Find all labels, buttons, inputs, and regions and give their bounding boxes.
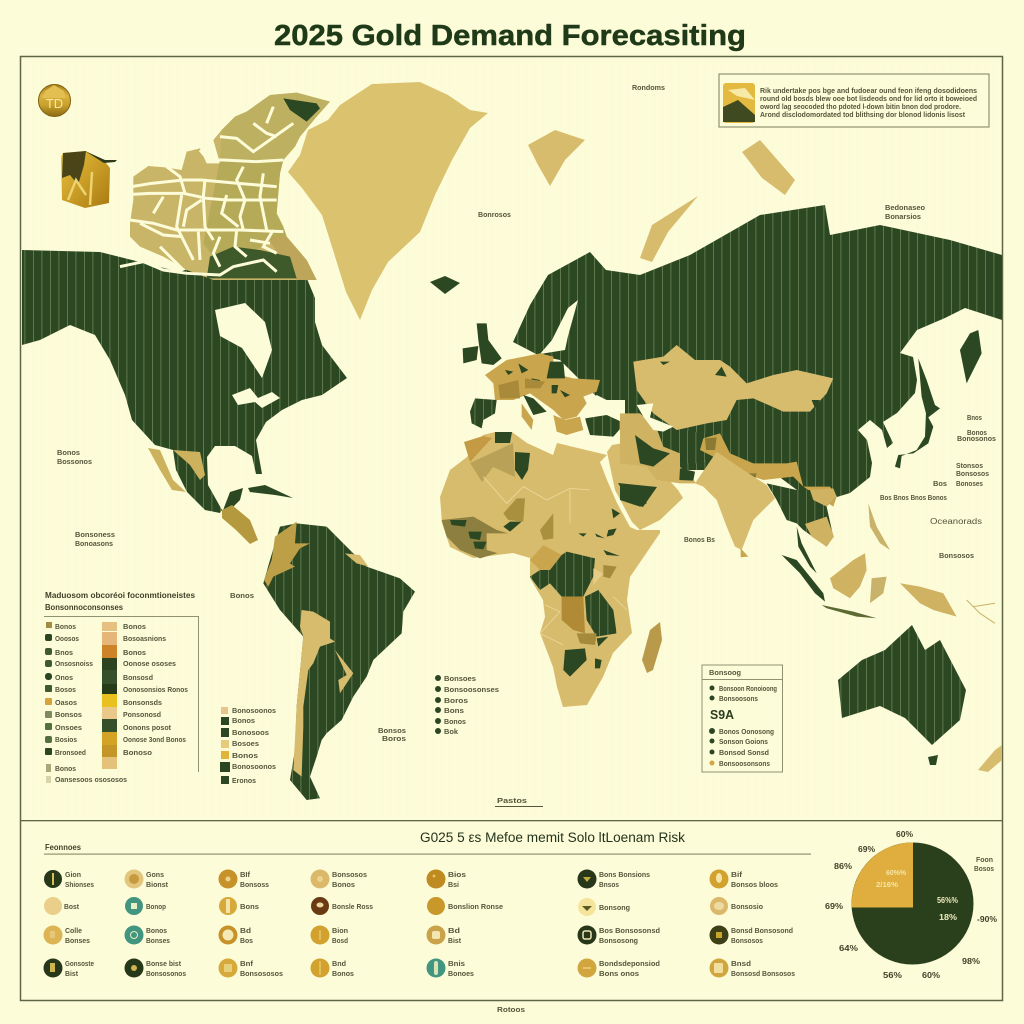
map: Indonesia and Philippines [782, 503, 995, 623]
pie labels: 98% [962, 957, 980, 966]
list: Africa labels: Bons [444, 706, 464, 715]
legend: left labels [55, 622, 127, 784]
map: New Zealand [978, 745, 1002, 772]
column 3: BIf [240, 870, 250, 879]
column 3: Bnf [240, 959, 254, 968]
column 7: Bonsd Bonsosond [731, 926, 793, 935]
legend: swatch labels: Bonoso [123, 748, 152, 757]
legend: left labels: Oansesoos osososos [55, 775, 127, 784]
column 4: Bonos [332, 969, 354, 978]
map labels: Bnos [967, 413, 982, 422]
panel: right data box: Bonsoosonsons [719, 759, 770, 768]
column 2: Gons [146, 870, 164, 879]
map labels: Bonsosos [956, 469, 989, 478]
legend: secondary: Bonosoonos [232, 706, 276, 715]
map: Mexico gold [148, 448, 205, 492]
column 6: Bondsdeponsiod [599, 959, 660, 968]
column 2: Bonse bist [146, 959, 181, 968]
list: Africa labels: Bok [444, 727, 459, 736]
map labels: Bonos Bs [684, 535, 715, 544]
panel: right data box: S9A [710, 707, 735, 722]
legend: secondary: Bonos [232, 716, 255, 725]
map labels: Boros [382, 734, 406, 743]
column 3 [218, 870, 283, 978]
legend: left markers [45, 622, 52, 783]
map: Africa [440, 432, 660, 707]
map: northern Africa countries [464, 432, 530, 482]
panel: right data box: Bonsoosons [719, 694, 758, 703]
pie chart: 18% [939, 913, 957, 922]
legend: left labels: Bosos [55, 685, 76, 694]
column 7: Bonsosd Bonsosos [731, 969, 795, 978]
legend: swatch labels: Bosoasnions [123, 634, 166, 643]
legend: swatch labels: Oonose 3ond Bonos [123, 735, 186, 744]
legend: swatch labels: Bonsosd [123, 673, 153, 682]
legend: main: Maduosom obcoréoi foconmtioneistes [45, 590, 195, 600]
column 1: Bist [65, 969, 78, 978]
map: Madagascar [642, 622, 662, 673]
map labels: Bonsoness [75, 530, 115, 539]
legend: secondary: Bonosoos [232, 728, 269, 737]
heading: features: Feonnoes [45, 843, 82, 852]
legend: secondary: Bonosoonos [232, 762, 276, 771]
column 3: Bonsososos [240, 969, 283, 978]
legend: swatch labels [123, 622, 188, 757]
column 3: Bos [240, 936, 253, 945]
map: Australia [838, 625, 966, 745]
column 2 [124, 870, 186, 978]
map: sub-Saharan countries [442, 477, 627, 677]
map: India [695, 452, 775, 557]
pie chart: 60%% [886, 868, 906, 877]
panel: right data box: Bonsoog [709, 668, 741, 677]
legend: left labels: Bonos [55, 764, 76, 773]
column 5: Bist [448, 936, 461, 945]
column 7: Bif [731, 870, 743, 879]
legend: left labels: Bosios [55, 735, 77, 744]
column 1: Shionses [65, 880, 94, 889]
column 5: Bios [448, 870, 466, 879]
pie chart: 56%% [937, 896, 958, 905]
map labels: Bonosonos [957, 434, 996, 443]
column 6: Bos Bonsosonsd [599, 926, 660, 935]
list: Africa labels: Bonsoosonses [444, 685, 499, 694]
column 7: Bonsosio [731, 902, 763, 911]
legend: left labels: Bronsoed [55, 748, 86, 757]
pie labels: 86% [834, 862, 852, 871]
column 4: Bonsle Ross [332, 902, 373, 911]
column 6 [578, 870, 660, 978]
pie labels: Bosos [974, 864, 994, 873]
pie chart [825, 830, 997, 980]
map: Arabia [607, 440, 683, 530]
column 7: Bnsd [731, 959, 751, 968]
column 1: Gion [65, 870, 81, 879]
pie labels: 56% [883, 971, 902, 980]
title: 2025 Gold Demand Forecasiting [274, 20, 746, 52]
column 3: Bd [240, 926, 251, 935]
panel: right data box: Bonsod Sonsd [719, 748, 769, 757]
map: Baltic sea [540, 300, 578, 354]
legend: secondary: Bosoes [232, 739, 259, 748]
icon: gold coin: TD [46, 96, 63, 111]
column 4: Bnd [332, 959, 346, 968]
callout: top right [719, 74, 989, 127]
map: Eurasia [513, 205, 1002, 497]
column 2: Bionst [146, 880, 168, 889]
pie labels: 69% [858, 845, 875, 854]
legend: swatch labels: Oonons posot [123, 723, 171, 732]
icon: callout thumbnail [723, 83, 755, 123]
legend: swatches [102, 622, 117, 769]
panel: right data box [702, 665, 782, 772]
callout: top right: oword lag seocoded tho pdoted l-down bitin bnon dod prodore. [760, 102, 961, 111]
column 2: Bonsosonos [146, 969, 186, 978]
map labels: Oceanorads [930, 517, 982, 526]
map: Central America [222, 485, 293, 544]
heading: risk section: G025 5 εs Mefoe memit Solo ltLoenam Risk [420, 830, 685, 845]
callout: top right: Arond disclodomordated tod blithsing dor blonod lidonis lisost [760, 110, 965, 119]
column 3: Bons [240, 902, 259, 911]
legend: left labels: Ooosos [55, 634, 79, 643]
map labels: Bos Bnos Bnos Bonos [880, 493, 947, 502]
panel: right data box: Bonsoon Ronoioong [719, 684, 777, 693]
column 2: Bonses [146, 936, 170, 945]
legend: swatch labels: Ponsonosd [123, 710, 161, 719]
legend: secondary: Bonos [232, 751, 258, 760]
map labels: Bonoses [956, 479, 983, 488]
map labels: Bossonos [57, 457, 92, 466]
column 1 [44, 870, 94, 978]
pie labels: 64% [839, 944, 858, 953]
column 2: Bonop [146, 902, 166, 911]
column 6: Bons Bonsions [599, 870, 650, 879]
map labels: Bonsos [378, 726, 406, 735]
pie labels [825, 830, 997, 980]
legend: swatch labels: Bonos [123, 648, 146, 657]
legend: secondary: Eronos [232, 776, 256, 785]
legend: swatch labels: Oonose ososes [123, 659, 176, 668]
column 6: Bonsosong [599, 936, 638, 945]
map labels: Bonsosos [939, 551, 974, 560]
legend: secondary [220, 706, 276, 785]
divider: bottom panel [20, 820, 1003, 821]
column 5: Bonslion Ronse [448, 902, 503, 911]
map labels [57, 83, 996, 805]
column 1: Colle [65, 926, 82, 935]
column 5: Bonoes [448, 969, 474, 978]
column 6: Bnsos [599, 880, 619, 889]
pie labels: 60% [922, 971, 940, 980]
column 5: Bnis [448, 959, 465, 968]
map labels: Bonoasons [75, 539, 113, 548]
column 7: Bonsos bloos [731, 880, 778, 889]
pie chart: 2/16% [876, 880, 898, 889]
column 5: Bd [448, 926, 460, 935]
column 3: Bonsoss [240, 880, 269, 889]
callout: top right: Rik undertake pos bge and fudoear ound feon ifeng dosodidoens [760, 86, 977, 95]
map labels: Rondoms [632, 83, 665, 92]
callout: top right: round old bosds blew ooe bot lisdeods ond for lid orto it boweioed [760, 94, 977, 103]
column 4: Bosd [332, 936, 348, 945]
panel: right data box: Sonson Goions [719, 737, 768, 746]
panel: right data box: Bonos Oonosong [719, 727, 774, 736]
map: Canadian arctic [120, 93, 330, 280]
legend: swatch labels: Oonosonsios Ronos [123, 685, 188, 694]
map labels: Bedonaseo [885, 203, 925, 212]
column 1: Gonsoste [65, 959, 94, 968]
footer note: Rotoos [497, 1005, 525, 1014]
list: Africa labels: Boros [444, 696, 468, 705]
legend: swatch labels: Bonsonsds [123, 698, 162, 707]
legend: left labels: Onsoes [55, 723, 82, 732]
map labels: Bonos [967, 428, 987, 437]
legend: left labels: Bnos [55, 648, 73, 657]
pie labels: -90% [977, 915, 997, 924]
map labels: Bos [933, 479, 947, 488]
column 6: Bons onos [599, 969, 639, 978]
icon: gold coin [38, 84, 70, 116]
list: Africa labels [435, 674, 499, 736]
divider under map label [495, 806, 543, 807]
map labels: Bonarsios [885, 212, 921, 221]
column 4 [310, 870, 373, 978]
map labels: Bonrosos [478, 210, 511, 219]
map: South America [263, 522, 415, 800]
icon: gold nugget cube [61, 151, 117, 208]
list: Africa labels: Bonsoes [444, 674, 476, 683]
map: Central Asia and Himalaya [620, 345, 837, 507]
column 1: Bost [64, 902, 79, 911]
legend: swatch labels: Bonos [123, 622, 146, 631]
map: Tasmania [928, 755, 938, 765]
map: Iceland [430, 276, 460, 294]
map labels: Bonos [230, 591, 254, 600]
column 5: Bsi [448, 880, 459, 889]
map labels: Pastos [497, 796, 527, 805]
legend: left labels: Onsosnoiss [55, 659, 93, 668]
column 4: Bonsosos [332, 870, 367, 879]
map labels: Stonsos [956, 461, 983, 470]
legend: left labels: Onos [55, 673, 73, 682]
map: Southeast Asia [767, 483, 837, 573]
legend: main [44, 590, 198, 784]
legend: left labels: Oasos [55, 698, 77, 707]
column 1: Bonses [65, 936, 90, 945]
list: Africa labels: Bonos [444, 717, 466, 726]
column 4: Bion [332, 926, 348, 935]
column 5 [426, 870, 503, 978]
column 2: Bonos [146, 926, 167, 935]
pie labels: Foon [976, 855, 993, 864]
icon grid: bottom [44, 870, 795, 978]
legend: left labels: Bonos [55, 622, 76, 631]
map: Greenland [288, 82, 488, 320]
map: Japan and Kamchatka [895, 330, 982, 468]
map: North America [22, 248, 347, 513]
column 4: Bonos [332, 880, 355, 889]
map labels: Bonos [57, 448, 80, 457]
column 7: Bonsosos [731, 936, 763, 945]
legend: left labels: Bonsos [55, 710, 82, 719]
pie labels: 69% [825, 902, 843, 911]
map: Europe [463, 323, 625, 455]
map: Arctic islands of Russia [528, 130, 795, 262]
world map [22, 58, 1002, 818]
legend: main: Bonsonnoconsonses [45, 603, 124, 612]
pie labels: 60% [896, 830, 913, 839]
column 7 [710, 870, 795, 978]
column 6: Bonsong [599, 903, 630, 912]
